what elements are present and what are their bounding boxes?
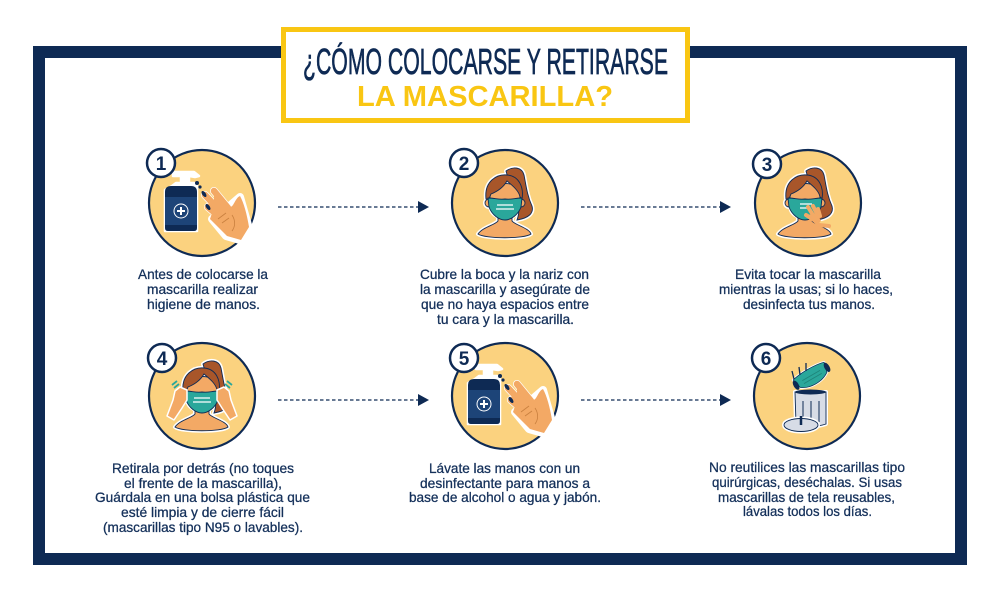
page frame	[39, 52, 961, 559]
text: step 1: mascarilla realizar	[147, 281, 258, 297]
text: step 6: quirúrgicas, deséchalas. Si usas	[712, 474, 902, 490]
text: step 5: Lávate las manos con un	[429, 460, 580, 476]
step 2 icon: woman wearing mask	[450, 149, 558, 256]
text: step 4	[95, 460, 310, 535]
step 6 icon: mask in trash can: 6	[761, 349, 771, 370]
step 2 icon: woman wearing mask: 2	[459, 154, 469, 175]
title line 2: LA MASCARILLA?	[357, 81, 613, 113]
text: step 6	[709, 459, 905, 519]
text: step 4: el frente de la mascarilla),	[124, 475, 282, 491]
text: step 2: Cubre la boca y la nariz con	[420, 266, 589, 282]
text: step 5	[409, 460, 601, 505]
text: step 6: mascarillas de tela reusables,	[718, 489, 895, 505]
text: step 3: Evita tocar la mascarilla	[735, 266, 881, 282]
step 3 icon: woman touching mask: 3	[762, 155, 772, 176]
step 4 icon: woman removing mask: 4	[157, 349, 168, 370]
arrow: step 5 to 6	[581, 394, 731, 406]
text: step 4: esté limpia y de cierre fácil	[121, 504, 284, 520]
title line 1: ¿CÓMO COLOCARSE Y RETIRARSE	[303, 41, 668, 82]
text: step 6: No reutilices las mascarillas tipo	[709, 459, 905, 475]
text: step 4: Retirala por detrás (no toques	[112, 460, 294, 476]
step 5 icon: hand sanitizer	[450, 343, 558, 449]
text: step 3	[719, 266, 893, 312]
arrow: step 1 to 2	[278, 201, 429, 213]
text: step 2: tu cara y la mascarilla.	[437, 311, 574, 327]
left hand	[167, 387, 187, 420]
text: step 1	[138, 266, 268, 312]
title box	[284, 30, 688, 120]
step 3 icon: woman touching mask	[753, 150, 861, 256]
text: step 5: base de alcohol o agua y jabón.	[409, 489, 601, 505]
text: step 1: Antes de colocarse la	[138, 266, 268, 282]
right hand	[217, 387, 237, 420]
step 6 icon: mask in trash can	[752, 343, 860, 449]
step 5 icon: hand sanitizer: 5	[459, 349, 470, 370]
text: step 5: desinfectante para manos a	[420, 475, 590, 491]
text: step 1: higiene de manos.	[147, 296, 260, 312]
text: step 2: que no haya espacios entre	[421, 296, 589, 312]
text: step 6: lávalas todos los días.	[743, 503, 872, 519]
arrow: step 2 to 3	[581, 201, 731, 213]
step 1 icon: hand sanitizer	[147, 149, 255, 256]
step 4 icon: woman removing mask	[148, 343, 255, 449]
text: step 4: Guárdala en una bolsa plástica que	[95, 489, 310, 505]
arrow: step 4 to 5	[278, 394, 429, 406]
text: step 2: la mascarilla y asegúrate de	[420, 281, 590, 297]
text: step 3: desinfecta tus manos.	[743, 296, 875, 312]
text: step 4: (mascarillas tipo N95 o lavables).	[103, 519, 303, 535]
step 1 icon: hand sanitizer: 1	[156, 154, 167, 175]
text: step 2	[420, 266, 590, 327]
text: step 3: mientras la usas; si lo haces,	[719, 281, 893, 297]
motion marks	[172, 381, 232, 388]
